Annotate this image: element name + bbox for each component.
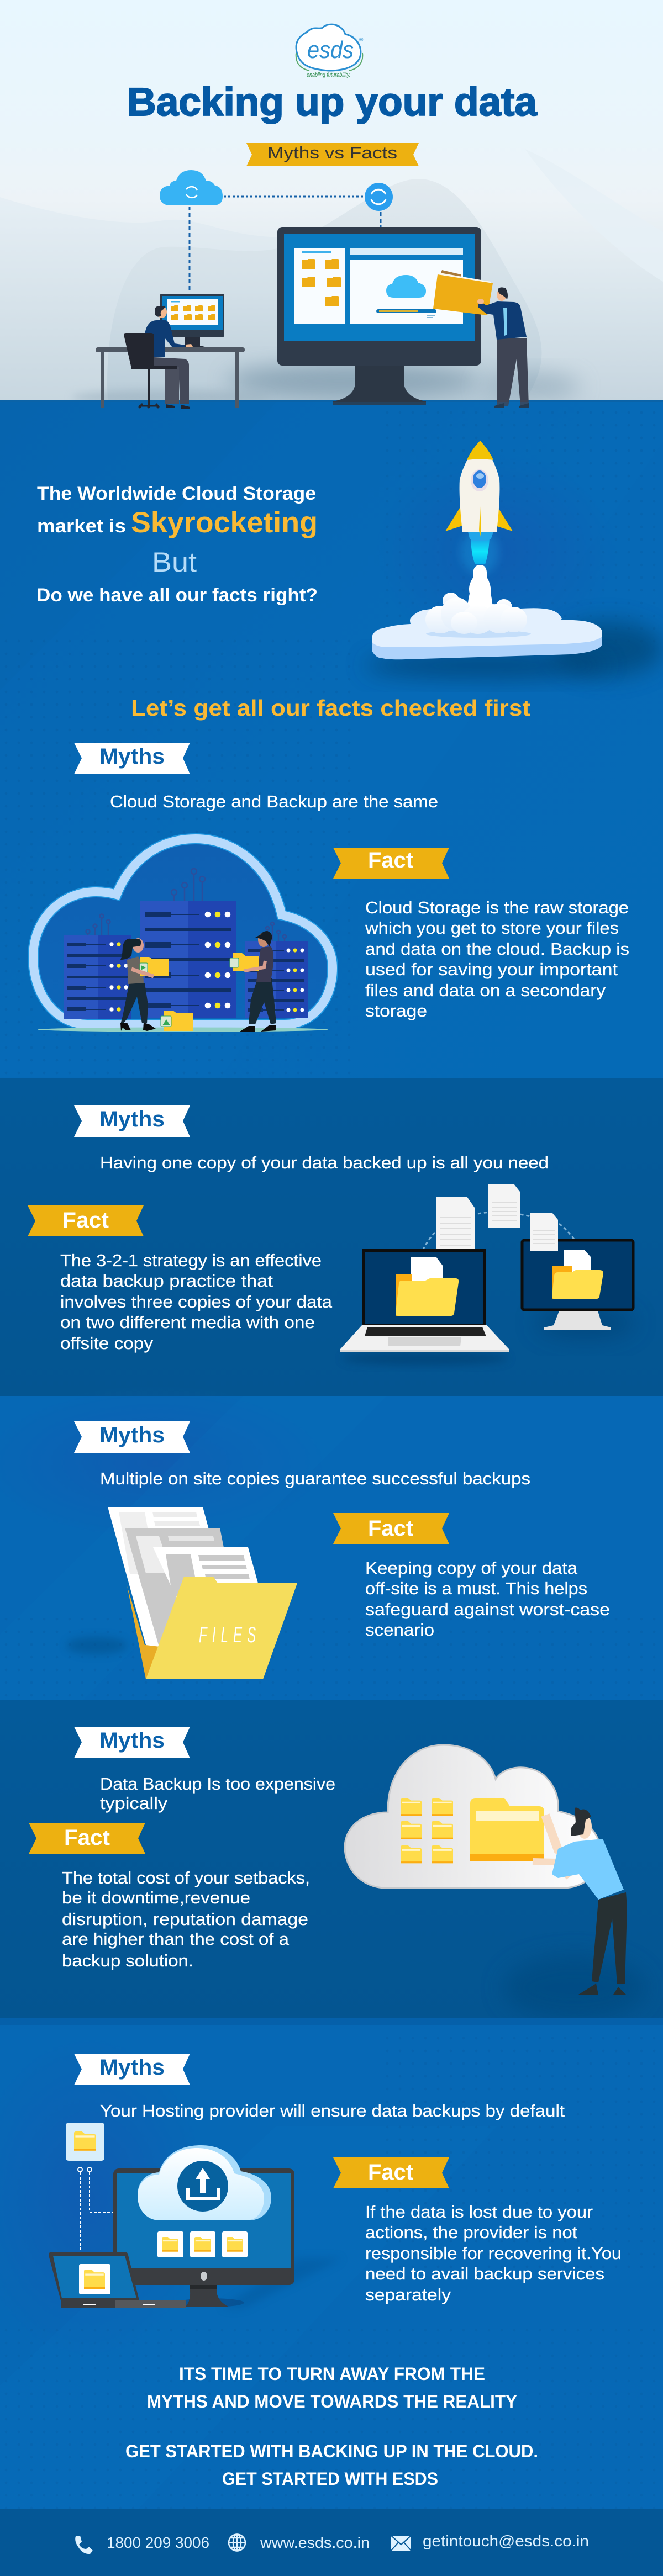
fact ribbon	[333, 848, 449, 879]
fact text: and data on the cloud. Backup is	[365, 940, 629, 959]
fact text: scenario	[365, 1621, 434, 1639]
closing statement: GET STARTED WITH ESDS	[222, 2469, 438, 2489]
closing statement: GET STARTED WITH BACKING UP IN THE CLOUD.	[125, 2441, 538, 2461]
fact text: Cloud Storage is the raw storage	[365, 898, 629, 917]
intro headline	[36, 483, 318, 606]
panel: myth 2	[0, 1078, 663, 1396]
intro headline: The Worldwide Cloud Storage	[37, 483, 316, 504]
myths ribbon: Myths	[99, 1728, 165, 1753]
panel: myth 4	[0, 1700, 663, 2021]
fact text: backup solution.	[62, 1951, 193, 1970]
fact text: off-site is a must. This helps	[365, 1579, 587, 1598]
myth statement: Your Hosting provider will ensure data backups by default	[100, 2102, 565, 2120]
fact text: The total cost of your setbacks,	[62, 1869, 310, 1887]
closing statement: ITS TIME TO TURN AWAY FROM THE	[179, 2364, 485, 2384]
fact text: If the data is lost due to your	[365, 2203, 593, 2221]
fact text: which you get to store your files	[365, 919, 619, 938]
myths ribbon	[74, 1421, 190, 1453]
fact text	[365, 1559, 610, 1639]
large monitor	[277, 227, 481, 405]
monitor upload illustration	[49, 2123, 343, 2308]
fact text: responsible for recovering it.You	[365, 2244, 622, 2263]
panel: footer	[0, 2509, 663, 2576]
panel: myth 5	[0, 2018, 663, 2509]
intro headline: market is	[37, 516, 126, 537]
section lead-in: Let’s get all our facts checked first	[131, 695, 530, 721]
icon: cloud sync	[160, 170, 223, 205]
fact text: Keeping copy of your data	[365, 1559, 577, 1578]
fact text: actions, the provider is not	[365, 2223, 578, 2242]
subtitle ribbon	[246, 143, 419, 166]
standing man	[477, 287, 529, 408]
cloud server illustration	[33, 839, 333, 1032]
fact ribbon: Fact	[62, 1208, 109, 1233]
myths ribbon: Myths	[99, 2055, 165, 2080]
cloud with folders and man	[345, 1745, 627, 1995]
myths ribbon	[74, 2054, 190, 2085]
fact text: used for saving your important	[365, 960, 618, 979]
fact text: disruption, reputation damage	[62, 1910, 308, 1929]
monitor	[522, 1240, 633, 1330]
intro headline: But	[152, 547, 197, 578]
closing statement	[125, 2364, 538, 2489]
icon: mail	[391, 2536, 411, 2551]
fact text: The 3-2-1 strategy is an effective	[60, 1251, 322, 1270]
myth statement: typically	[100, 1794, 168, 1813]
intro headline: Do we have all our facts right?	[36, 585, 318, 606]
fact ribbon	[333, 2157, 449, 2188]
rocket on cloud	[372, 441, 602, 659]
fact text	[365, 2203, 622, 2304]
myths ribbon	[74, 1105, 190, 1137]
laptop	[340, 1250, 509, 1352]
myth statement: Having one copy of your data backed up is all you need	[100, 1154, 549, 1172]
panel: intro	[0, 402, 663, 1078]
fact ribbon: Fact	[64, 1826, 110, 1850]
folder on ground	[161, 1011, 193, 1031]
icon: document 2	[488, 1184, 520, 1228]
logo	[296, 24, 364, 78]
title: Backing up your data	[127, 81, 538, 124]
fact text: be it downtime,revenue	[62, 1889, 250, 1907]
email: getintouch@esds.co.in	[423, 2532, 589, 2549]
myths ribbon: Myths	[99, 1107, 165, 1131]
fact text: offsite copy	[60, 1334, 154, 1353]
myths ribbon: Myths	[99, 744, 165, 769]
subtitle ribbon: Myths vs Facts	[267, 143, 397, 162]
files folder illustration: FILES	[199, 1622, 256, 1647]
desk with seated man	[96, 294, 245, 409]
panel: myth 3	[0, 1386, 663, 1700]
myth statement: Multiple on site copies guarantee successful backups	[100, 1469, 530, 1488]
man with folder	[230, 931, 276, 1032]
fact text: need to avail backup services	[365, 2265, 604, 2283]
icon: globe	[229, 2534, 245, 2551]
logo: ®	[359, 37, 364, 43]
myths ribbon	[74, 743, 190, 774]
woman with folder	[120, 938, 169, 1031]
phone number: 1800 209 3006	[107, 2534, 209, 2551]
files folder illustration	[66, 1507, 297, 1679]
website: www.esds.co.in	[260, 2534, 370, 2551]
myths ribbon	[74, 1727, 190, 1758]
folder being carried	[433, 270, 493, 315]
logo: esds	[307, 36, 354, 64]
fact text: are higher than the cost of a	[62, 1930, 289, 1949]
fact text: involves three copies of your data	[60, 1293, 332, 1311]
panel: header illustration	[0, 0, 663, 1078]
icon: phone	[75, 2536, 93, 2554]
fact ribbon: Fact	[368, 1516, 413, 1541]
myth statement	[100, 1775, 335, 1813]
fact ribbon: Fact	[368, 848, 413, 872]
fact ribbon: Fact	[368, 2160, 413, 2184]
fact text: storage	[365, 1002, 427, 1020]
myths ribbon: Myths	[99, 1423, 165, 1447]
myth statement: Cloud Storage and Backup are the same	[110, 792, 438, 811]
fact text	[62, 1869, 310, 1970]
fact ribbon	[28, 1205, 144, 1236]
fact text: data backup practice that	[60, 1272, 273, 1290]
icon: document 1	[436, 1197, 475, 1251]
panel: myth 1	[33, 743, 629, 1032]
fact text: separately	[365, 2286, 451, 2304]
fact text: safeguard against worst-case	[365, 1600, 610, 1619]
fact ribbon	[29, 1823, 145, 1854]
myth statement: Data Backup Is too expensive	[100, 1775, 335, 1794]
logo: enabling futurability.	[307, 72, 350, 78]
laptop and monitor illustration	[340, 1184, 635, 1365]
fact text	[60, 1251, 332, 1353]
fact text	[365, 898, 629, 1020]
fact ribbon	[333, 1513, 449, 1544]
intro headline: Skyrocketing	[131, 506, 318, 539]
icon: document 3	[530, 1213, 558, 1251]
fact text: files and data on a secondary	[365, 981, 606, 1000]
closing statement: MYTHS AND MOVE TOWARDS THE REALITY	[147, 2392, 517, 2411]
fact text: on two different media with one	[60, 1313, 315, 1332]
icon: sync circle	[365, 183, 393, 211]
